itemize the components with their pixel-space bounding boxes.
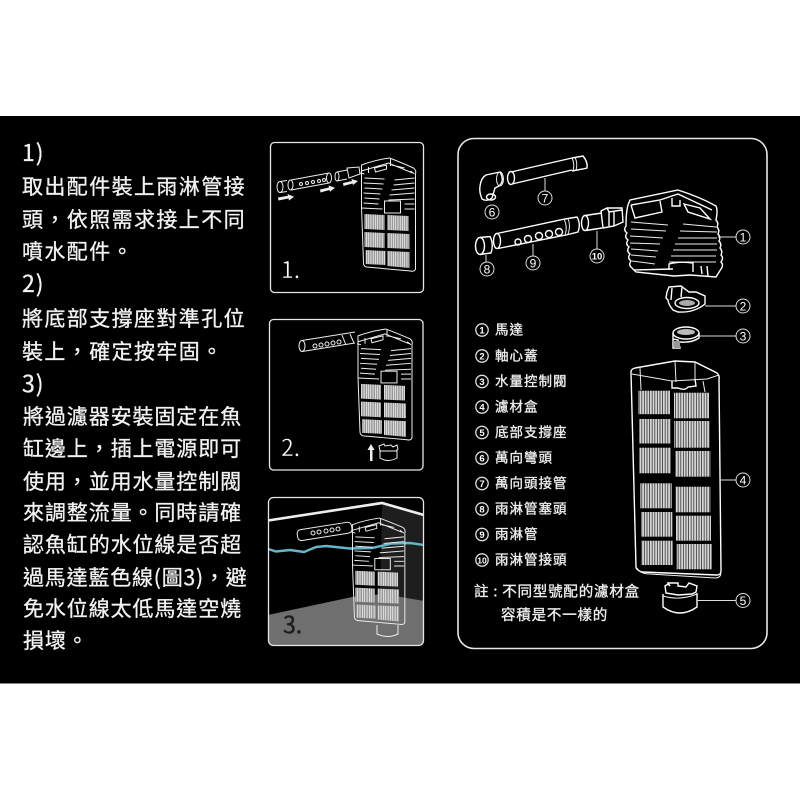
black background band	[0, 116, 800, 684]
step 3 body: 認魚缸的水位線是否超	[23, 529, 242, 559]
part 2 leader and label	[705, 299, 750, 313]
infographic canvas	[0, 116, 800, 684]
step 2 body	[22, 303, 246, 366]
legend item 1: 1	[479, 326, 485, 336]
legend item 6: 萬向彎頭	[495, 446, 553, 466]
legend item 9: 9	[479, 530, 485, 541]
note	[474, 580, 640, 625]
part 7 leader and label: 7	[542, 191, 549, 205]
tank rim	[268, 503, 424, 520]
panel: step 2 illustration	[270, 320, 423, 470]
right tank wall	[380, 503, 424, 606]
step 3 heading: 3)	[22, 365, 45, 399]
part 5 leader and label	[697, 594, 750, 608]
spray pipe	[299, 332, 355, 352]
legend item 4: 濾材盒	[495, 396, 538, 416]
step 3 body: 缸邊上，插上電源即可	[23, 433, 242, 463]
legend item 10: 雨淋管接頭	[495, 548, 568, 568]
part 6 label: 6	[489, 205, 496, 219]
part 2: shaft cover	[666, 286, 705, 312]
part 6 label	[485, 205, 499, 219]
legend item 8: 8	[479, 504, 485, 516]
part 1 leader and label	[718, 230, 750, 244]
step 1 body	[22, 171, 246, 266]
filter assembly	[352, 518, 405, 625]
legend item 5: 5	[479, 428, 485, 439]
part 9 label: 9	[530, 256, 537, 270]
legend item 9	[476, 523, 538, 543]
legend item 5: 底部支撐座	[495, 421, 568, 441]
part 6: elbow	[480, 172, 504, 200]
panel: step 1 illustration	[270, 142, 424, 292]
step 3 body: 使用，並用水量控制閥	[23, 466, 242, 496]
step 3 body: 來調整流量。同時請確	[23, 497, 242, 527]
part 8 label	[480, 255, 494, 276]
filter windows	[638, 391, 712, 569]
frame	[268, 498, 424, 646]
step 2 heading: 2)	[22, 265, 45, 299]
legend item 4	[476, 396, 538, 416]
note: 容積是不一樣的	[501, 604, 608, 625]
step 2 body: 將底部支撐座對準孔位	[22, 303, 246, 333]
legend item 2: 2	[479, 352, 485, 362]
spray pipe parts	[277, 167, 360, 192]
part 3 leader and label: 3	[740, 329, 747, 343]
support base	[379, 444, 398, 460]
part 4 leader and label: 4	[740, 473, 747, 487]
parts legend	[476, 318, 568, 568]
legend item 9: 雨淋管	[495, 523, 538, 543]
filter base	[377, 625, 398, 636]
legend item 1	[476, 318, 524, 338]
part 7: connecting tube	[508, 156, 587, 184]
step number: 1.	[281, 251, 300, 285]
legend item 2	[476, 344, 538, 364]
step number: 2.	[281, 429, 300, 463]
legend item 3: 水量控制閥	[495, 370, 568, 390]
part 10 label	[590, 231, 604, 263]
part 5: support base	[663, 583, 697, 613]
legend item 10: 10	[477, 556, 487, 566]
legend item 2: 軸心蓋	[495, 344, 538, 364]
legend item 8: 雨淋管塞頭	[495, 498, 568, 518]
part 1 leader and label: 1	[740, 230, 747, 244]
legend item 3: 3	[479, 377, 485, 388]
part 5 leader and label: 5	[740, 594, 747, 608]
step 1 heading: 1)	[22, 134, 45, 168]
water line	[268, 543, 424, 552]
step number: 3.	[283, 606, 302, 640]
part 4: media box	[631, 361, 721, 578]
panel: step 3 illustration	[268, 497, 424, 646]
note: 註 : 不同型號配的濾材盒	[474, 580, 640, 602]
legend item 1: 馬達	[495, 318, 524, 338]
part 9: spray pipe	[494, 217, 579, 248]
legend item 4: 4	[479, 402, 485, 414]
step 3 body: 將過濾器安裝固定在魚	[23, 401, 242, 431]
legend item 7: 7	[479, 479, 485, 490]
part 10: pipe joint	[582, 208, 623, 230]
step 1 body: 取出配件裝上雨淋管接	[22, 171, 246, 201]
part 8 label: 8	[484, 262, 491, 276]
legend item 7: 萬向頭接管	[495, 472, 568, 492]
filter assembly	[357, 329, 412, 440]
step 3 body: 損壞。	[23, 625, 89, 655]
part 4 leader and label	[720, 473, 750, 487]
legend item 6: 6	[479, 454, 485, 464]
tank floor	[268, 594, 424, 646]
part 3 leader and label	[699, 329, 750, 343]
filter assembly	[360, 158, 416, 271]
part 10 label: 10	[592, 252, 602, 262]
step 3 body	[23, 401, 247, 655]
part 7 leader and label	[538, 178, 552, 205]
step 3 body: 過馬達藍色線(圖3)，避	[23, 562, 247, 592]
step 1 body: 頭，依照需求接上不同	[22, 204, 246, 234]
part 8: end cap	[476, 236, 492, 254]
part 9 label	[526, 244, 540, 270]
arrow up	[368, 444, 374, 461]
instruction text block	[22, 134, 247, 655]
part 3: flow valve	[673, 327, 699, 348]
part 1: motor	[625, 190, 722, 277]
spray pipe	[297, 522, 353, 541]
part 2 leader and label: 2	[740, 299, 747, 313]
panel: parts diagram	[458, 138, 767, 648]
step 1 body: 噴水配件。	[22, 236, 134, 266]
step 2 body: 裝上，確定按牢固。	[22, 336, 224, 366]
arrows	[278, 179, 358, 200]
step 3 body: 免水位線太低馬達空燒	[23, 593, 242, 623]
